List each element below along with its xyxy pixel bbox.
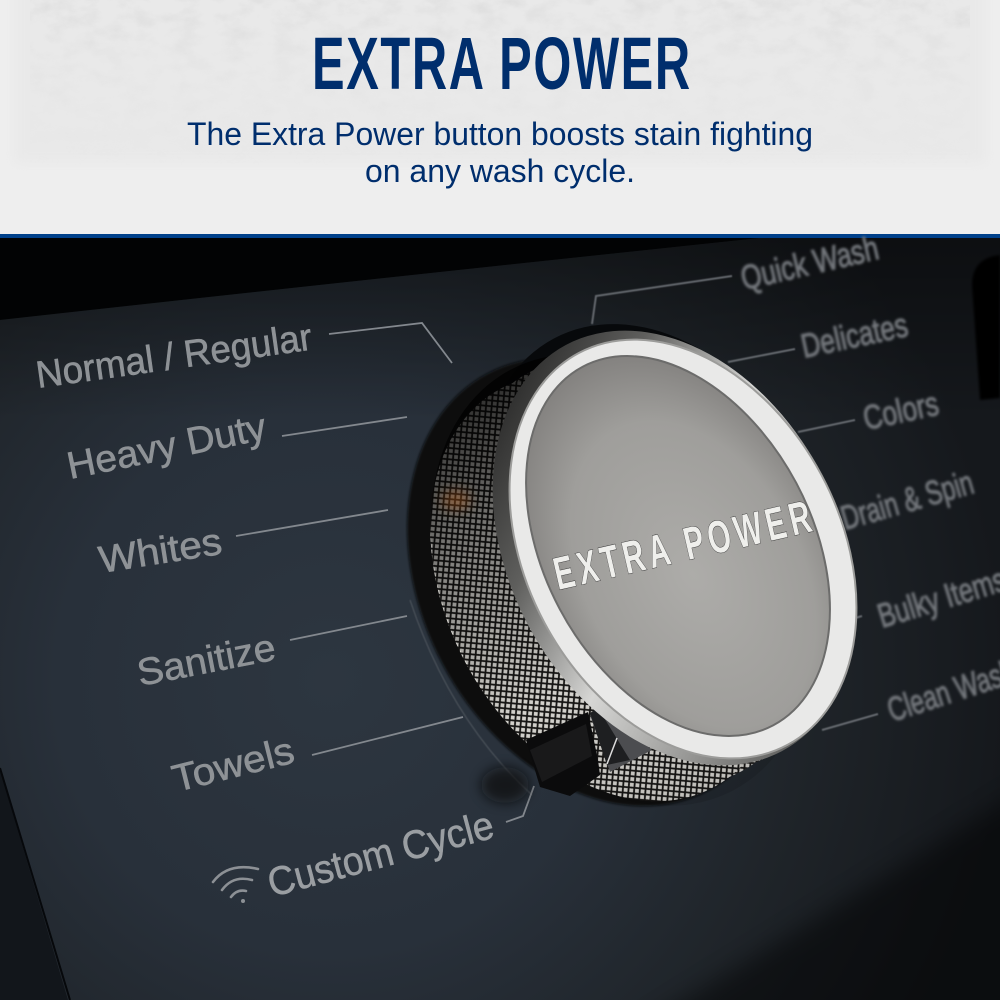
leader lines: right xyxy=(592,276,878,730)
subtitle text block xyxy=(187,116,813,189)
subtitle text block: on any wash cycle. xyxy=(365,153,635,189)
pointer tab xyxy=(526,705,652,796)
blue divider bar xyxy=(0,234,1000,238)
subtitle text block: The Extra Power button boosts stain fighting xyxy=(187,116,813,152)
knurled side of knob xyxy=(355,283,907,873)
button face xyxy=(464,304,892,788)
dial knob xyxy=(332,261,928,873)
chrome outer ring xyxy=(420,267,928,829)
panel: washer control panel xyxy=(0,238,1000,1000)
header panel xyxy=(30,0,970,94)
white ring xyxy=(440,279,926,819)
left cycle labels xyxy=(33,317,498,906)
button label: EXTRA POWER xyxy=(549,491,816,600)
label: Whites: Whites xyxy=(96,521,225,582)
title: EXTRA POWER xyxy=(312,23,690,106)
label: Colors: Colors xyxy=(860,385,942,438)
right cycle labels (out of focus) xyxy=(737,229,1000,730)
label: Sanitize: Sanitize xyxy=(134,627,279,695)
leader lines: left xyxy=(236,323,534,822)
label: Normal / Regular: Normal / Regular xyxy=(33,317,315,397)
label: Quick Wash: Quick Wash xyxy=(737,229,882,298)
label: Towels: Towels xyxy=(168,730,298,801)
label: Heavy Duty: Heavy Duty xyxy=(63,406,270,488)
knob shadow well xyxy=(332,261,911,873)
label: Delicates: Delicates xyxy=(798,306,911,366)
label: Custom Cycle: Custom Cycle xyxy=(263,803,498,906)
icon: wifi xyxy=(213,867,258,903)
